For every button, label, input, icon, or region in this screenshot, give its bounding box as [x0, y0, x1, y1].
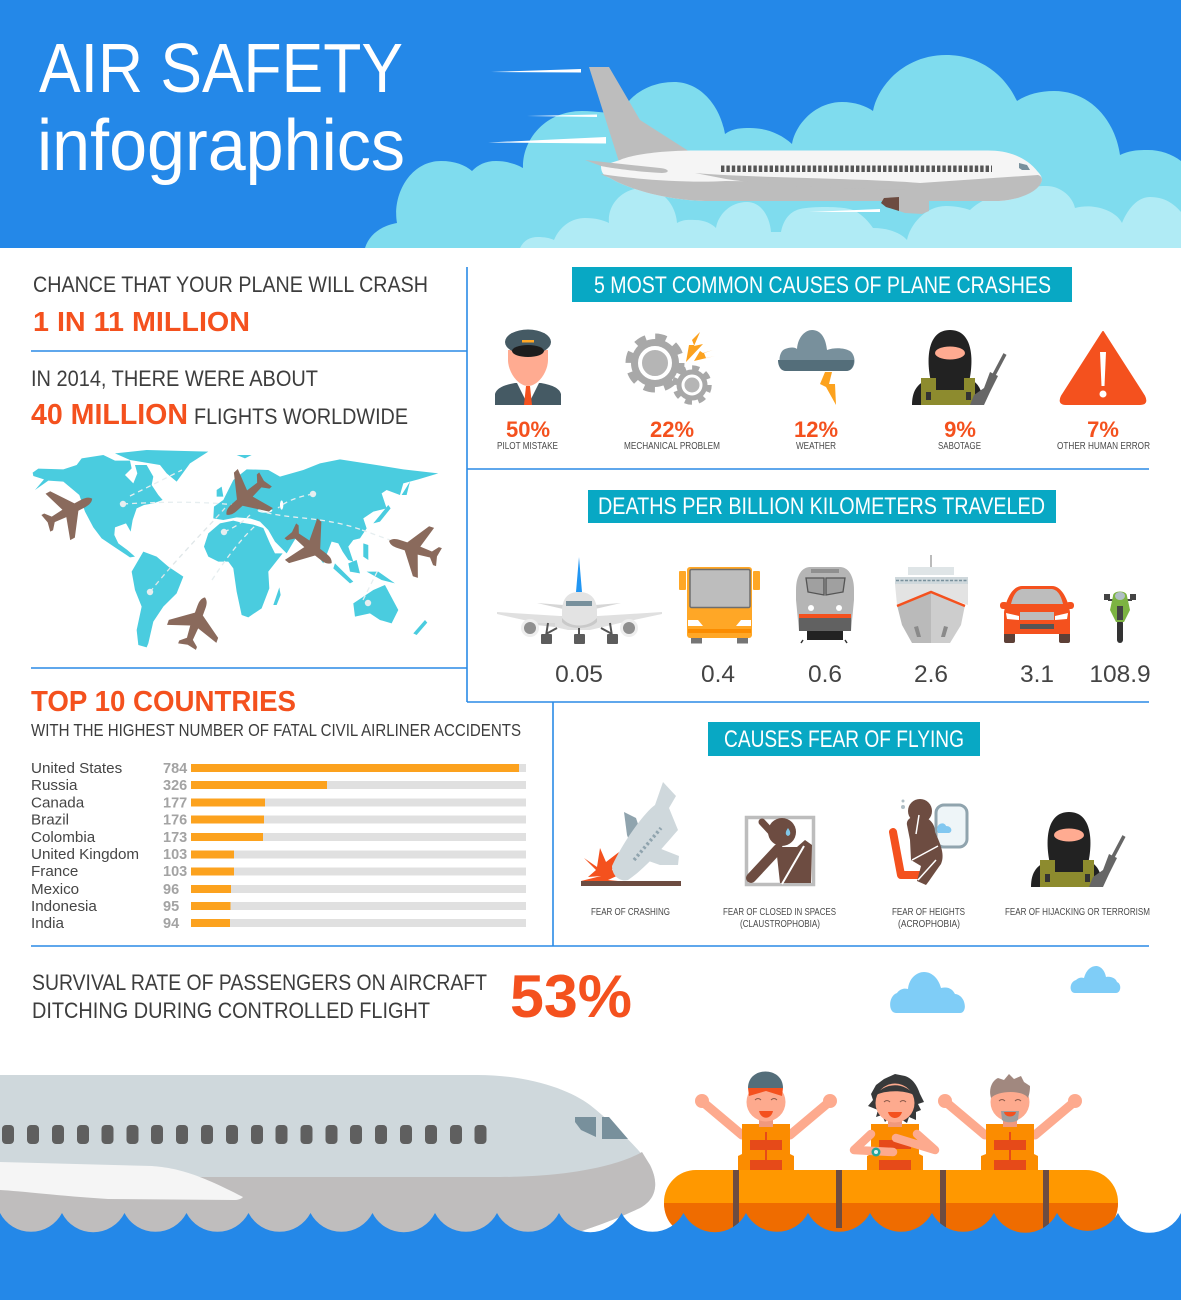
icon: gears [629, 332, 715, 402]
bar chart: 94 [163, 916, 179, 932]
world map [33, 450, 447, 656]
cockpit windows [575, 1117, 628, 1139]
bar chart: 326 [163, 778, 187, 794]
title: infographics [37, 106, 405, 186]
bar chart: Brazil [31, 812, 69, 828]
stat: sabotage: SABOTAGE [938, 441, 981, 452]
person 2 with watch [854, 1074, 935, 1175]
label: heights: (ACROPHOBIA) [898, 919, 960, 930]
panel: flights worldwide: IN 2014, THERE WERE ABOUT [31, 366, 318, 391]
bar chart: 176 [163, 812, 187, 828]
bar chart: France [31, 863, 78, 880]
bar chart [31, 760, 526, 932]
icon: claustrophobia [746, 818, 814, 884]
section divider lines [31, 267, 1149, 946]
icon: pilot [495, 330, 561, 405]
bar chart: 177 [163, 796, 187, 812]
label: heights [892, 907, 965, 930]
flight routes [123, 470, 390, 600]
panel: flights worldwide: FLIGHTS WORLDWIDE [194, 404, 408, 429]
airplane [585, 67, 1042, 214]
panel: survival rate: 53% [510, 963, 632, 1030]
values: 2.6 [914, 661, 948, 688]
bar chart: 103 [163, 864, 187, 880]
label: closed spaces: FEAR OF CLOSED IN SPACES [723, 907, 836, 918]
label: crashing: FEAR OF CRASHING [591, 907, 670, 918]
panel: survival rate: DITCHING DURING CONTROLLED FLIGHT [32, 998, 430, 1023]
bar chart: United Kingdom [31, 846, 139, 863]
icon: acrophobia [893, 799, 967, 885]
speed lines [488, 69, 880, 212]
bar chart: Canada [31, 794, 85, 812]
icon: terrorist [912, 330, 1005, 405]
icon: bus [679, 567, 760, 644]
icon: crashing plane [581, 782, 681, 886]
stat: mechanical problem [624, 417, 720, 452]
bar chart: 173 [163, 830, 187, 846]
header banner [0, 0, 1181, 248]
icon: motorcycle [1104, 592, 1136, 643]
map airplanes [33, 460, 447, 656]
values: 3.1 [1020, 661, 1054, 688]
bar chart: India [31, 915, 64, 932]
person 1 in cap [695, 1072, 837, 1175]
icon: warning triangle [1061, 332, 1145, 404]
stat: sabotage [938, 417, 981, 452]
title: AIR SAFETY [39, 29, 403, 107]
panel: deaths per billion kilometers [497, 490, 1151, 688]
stat: other human error: 7% [1087, 417, 1119, 442]
label: hijacking: FEAR OF HIJACKING OR TERRORISM [1005, 907, 1150, 918]
stat: other human error: OTHER HUMAN ERROR [1057, 441, 1150, 452]
panel: top 10 countries [31, 686, 526, 932]
bar chart: 95 [163, 899, 179, 915]
icon: train [796, 567, 854, 643]
heading banner [572, 267, 1072, 302]
values: 0.6 [808, 661, 842, 688]
cabin windows [2, 1125, 486, 1144]
label: closed spaces: (CLAUSTROPHOBIA) [740, 919, 820, 930]
bar chart: United States [31, 760, 123, 777]
panel: crash chance: 1 IN 11 MILLION [33, 306, 250, 337]
heading banner: 5 MOST COMMON CAUSES OF PLANE CRASHES [594, 272, 1051, 299]
sky clouds [890, 966, 1120, 1013]
heading banner: CAUSES FEAR OF FLYING [724, 726, 964, 753]
clouds: front layer [520, 186, 1181, 248]
values: 0.4 [701, 661, 735, 688]
stat: weather: WEATHER [796, 441, 836, 452]
bar chart: 103 [163, 847, 187, 863]
panel: flights worldwide: 40 MILLION [31, 399, 188, 431]
panel: survival rate: SURVIVAL RATE OF PASSENGERS ON AIRCRAFT [32, 970, 487, 995]
panel: flights worldwide [31, 366, 408, 431]
icon: ship [895, 555, 968, 643]
panel: causes of plane crashes [495, 267, 1150, 452]
bar chart: 784 [163, 761, 187, 777]
clouds: back layer [365, 55, 1181, 248]
bar chart: 96 [163, 882, 179, 898]
values: 0.05 [555, 661, 603, 688]
stat: other human error [1057, 417, 1150, 452]
stat: mechanical problem: MECHANICAL PROBLEM [624, 441, 720, 452]
label: heights: FEAR OF HEIGHTS [892, 907, 965, 918]
heading banner [588, 490, 1056, 523]
icon: airplane front [497, 557, 662, 644]
stat: pilot mistake: 50% [506, 417, 550, 442]
label: closed spaces [723, 907, 836, 930]
icon: hijacking [1031, 812, 1124, 887]
life raft [664, 1170, 1118, 1235]
panel: crash chance: CHANCE THAT YOUR PLANE WILL CRASH [33, 272, 428, 297]
title [37, 29, 405, 186]
panel: crash chance [33, 272, 428, 337]
stat: pilot mistake: PILOT MISTAKE [497, 441, 558, 452]
panel: survival rate [32, 963, 632, 1030]
wing [0, 1162, 243, 1200]
bar chart: Colombia [31, 829, 96, 846]
route points [120, 491, 371, 606]
large airplane [0, 1075, 655, 1235]
stat: pilot mistake [497, 417, 558, 452]
icon: storm cloud [778, 330, 855, 405]
stat: sabotage: 9% [944, 417, 976, 442]
heading banner: DEATHS PER BILLION KILOMETERS TRAVELED [598, 493, 1045, 520]
bar chart: Mexico [31, 881, 79, 898]
values [555, 661, 1151, 688]
stat: weather: 12% [794, 417, 838, 442]
subheading: WITH THE HIGHEST NUMBER OF FATAL CIVIL AIRLINER ACCIDENTS [31, 720, 521, 740]
heading: TOP 10 COUNTRIES [31, 686, 296, 718]
heading banner [708, 722, 980, 756]
water waves [0, 1213, 1181, 1300]
icon: car [1000, 586, 1074, 643]
stat: mechanical problem: 22% [650, 417, 694, 442]
person 3 with beard [938, 1074, 1082, 1175]
bar chart: Indonesia [31, 898, 97, 915]
bar chart: Russia [31, 777, 78, 794]
values: 108.9 [1089, 661, 1151, 688]
panel: causes fear of flying [581, 722, 1150, 930]
